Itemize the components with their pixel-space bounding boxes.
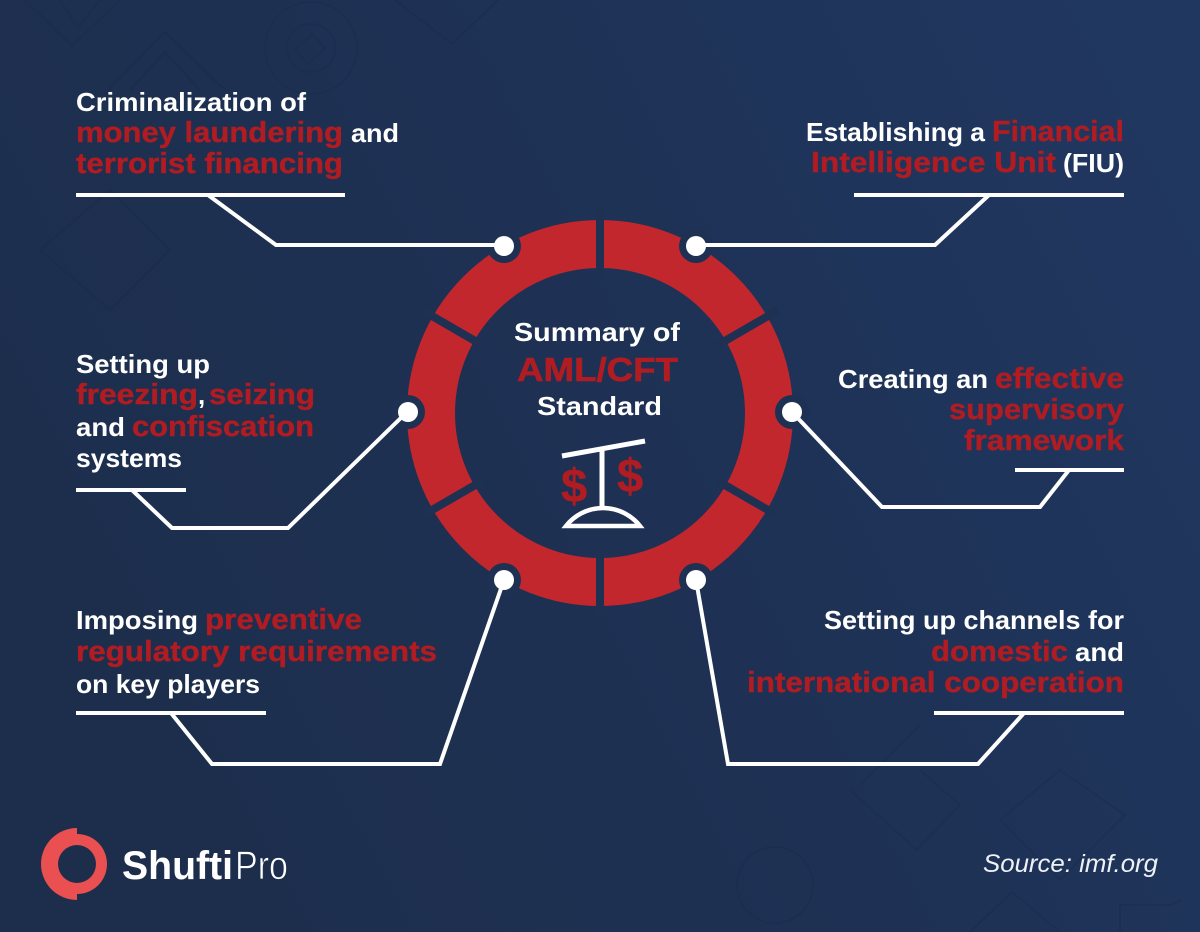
text block: supervisory framework: framework bbox=[964, 425, 1125, 457]
text block: preventive requirements bbox=[76, 604, 437, 699]
text block: freezing, seizing: freezing bbox=[76, 379, 198, 411]
text block: criminalization bbox=[76, 87, 399, 180]
text block: supervisory framework: effective bbox=[995, 363, 1124, 395]
text block: cooperation: international cooperation bbox=[747, 667, 1124, 699]
connector: FIU bbox=[696, 195, 1124, 245]
text block: FIU: Financial bbox=[992, 116, 1124, 148]
node halos bbox=[391, 229, 809, 597]
connector: supervisory framework bbox=[792, 412, 1124, 507]
text block: supervisory framework: Creating an bbox=[838, 364, 988, 394]
text block: cooperation bbox=[747, 605, 1124, 699]
text block: supervisory framework bbox=[838, 363, 1125, 457]
text block: freezing, seizing: and bbox=[76, 412, 125, 442]
logo: ShuftiPro: Shufti bbox=[122, 844, 233, 888]
connector: freezing and seizing bbox=[76, 412, 407, 528]
text block: criminalization: money laundering bbox=[76, 117, 343, 149]
center title bbox=[514, 317, 680, 421]
icon: balance scale with dollars bbox=[561, 441, 645, 526]
text block: criminalization: Criminalization of bbox=[76, 87, 306, 117]
text block: freezing, seizing: Setting up bbox=[76, 349, 210, 379]
icon: balance scale with dollars: $ bbox=[617, 449, 643, 502]
text block: preventive requirements: on key players bbox=[76, 669, 260, 699]
icon: balance scale with dollars: $ bbox=[561, 459, 587, 512]
segmented ring bbox=[422, 208, 778, 618]
text block: preventive requirements: Imposing bbox=[76, 605, 198, 635]
connector: cooperation bbox=[696, 580, 1124, 764]
text block: freezing, seizing bbox=[76, 349, 315, 473]
text block: criminalization: terrorist financing bbox=[76, 148, 343, 180]
connector: preventive requirements bbox=[76, 580, 504, 764]
text block: freezing, seizing: seizing bbox=[209, 379, 315, 411]
center title: AML/CFT bbox=[517, 351, 678, 388]
center title: Standard bbox=[537, 391, 662, 421]
text block: FIU: Intelligence Unit bbox=[811, 147, 1056, 179]
connector: criminalization bbox=[76, 195, 504, 245]
text block: freezing, seizing: confiscation bbox=[132, 411, 314, 443]
text block: FIU: Establishing a bbox=[806, 117, 986, 147]
text block: cooperation: and bbox=[1075, 637, 1124, 667]
text block: FIU bbox=[806, 116, 1124, 179]
text block: supervisory framework: supervisory bbox=[949, 394, 1124, 426]
logo: ShuftiPro bbox=[41, 828, 288, 900]
text block: cooperation: domestic bbox=[931, 636, 1068, 668]
text block: preventive requirements: preventive bbox=[205, 604, 362, 636]
text block: criminalization: and bbox=[351, 118, 399, 148]
connector nodes bbox=[398, 236, 802, 590]
text block: freezing, seizing: systems bbox=[76, 443, 182, 473]
text block: freezing, seizing: , bbox=[198, 380, 205, 410]
text block: FIU: (FIU) bbox=[1063, 148, 1124, 178]
text block: preventive requirements: regulatory requirements bbox=[76, 636, 437, 668]
center title: Summary of bbox=[514, 317, 680, 347]
text block: cooperation: Setting up channels for bbox=[824, 605, 1124, 635]
source note: Source: imf.org bbox=[983, 850, 1158, 878]
logo: ShuftiPro: Pro bbox=[235, 844, 288, 888]
